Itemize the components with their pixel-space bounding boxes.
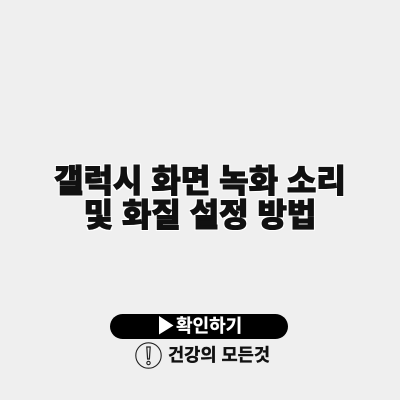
button: confirm: 확인하기	[176, 316, 242, 336]
icon: exclamation circle	[135, 342, 162, 369]
button: confirm	[110, 314, 288, 339]
brand label: 건강의 모든것	[168, 345, 270, 365]
title: 및 화질 설정 방법	[84, 197, 316, 233]
title	[54, 163, 346, 233]
title: 갤럭시 화면 녹화 소리	[54, 163, 346, 199]
